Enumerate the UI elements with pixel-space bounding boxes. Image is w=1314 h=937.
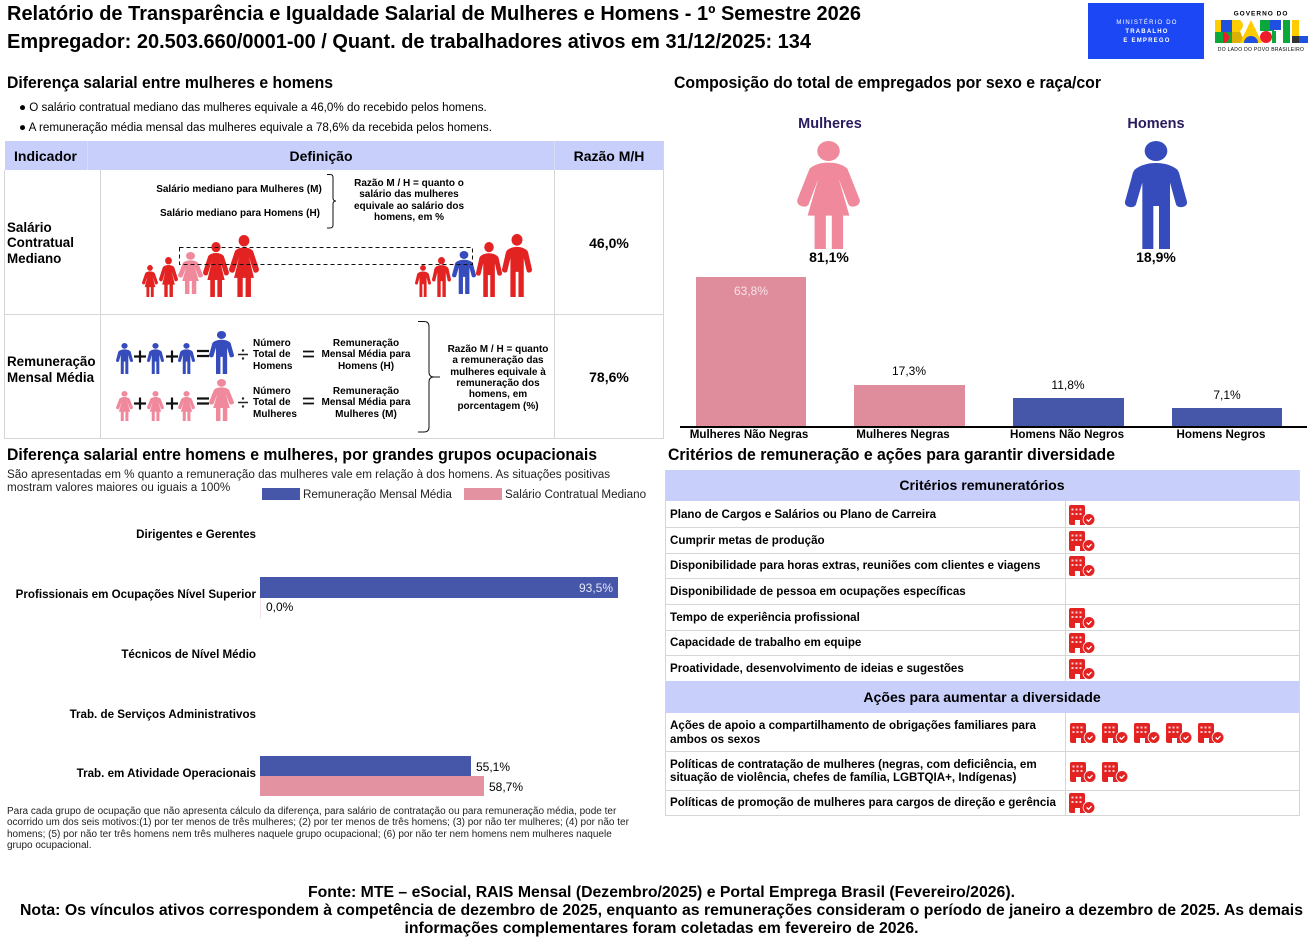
bar chart: occupational groups: Trab. de Serviços Administrativos (70, 708, 256, 721)
criteria rows: Disponibilidade para horas extras, reuniões com clientes e viagens (670, 559, 1040, 572)
formula: men (116, 331, 411, 374)
table header: Indicador (14, 148, 78, 164)
panel: criteria table (666, 470, 1300, 816)
formula: men: Remuneração (333, 338, 399, 349)
bar chart: occupational groups: Dirigentes e Gerentes (136, 528, 256, 541)
action rows: situação de violência, chefes de família, LGBTQIA+, Indígenas) (670, 771, 1016, 784)
row label: Salário Contratual Mediano: Mediano (7, 251, 61, 266)
formula: men: Total de (253, 349, 291, 360)
panel: Homens (1125, 116, 1187, 265)
criteria rows: Tempo de experiência profissional (670, 611, 860, 624)
brace (418, 322, 440, 432)
text block: footnote: Para cada grupo de ocupação que não apresenta cálculo da diferença, para salário de contratação ou para remuneração média, pode ter (7, 806, 617, 817)
logo: Governo do Brasil (1215, 10, 1308, 53)
text: razão remuneração: homens, em (469, 389, 527, 400)
row label: Salário Contratual Mediano: Contratual (7, 235, 74, 250)
action icons (1069, 723, 1224, 814)
criteria rows: Disponibilidade de pessoa em ocupações específicas (670, 585, 966, 598)
bar chart: composition by race: Mulheres Negras (856, 428, 950, 441)
footer: source and note: Fonte: MTE – eSocial, RAIS Mensal (Dezembro/2025) e Portal Emprega Brasil (Fevereiro/2026). (308, 884, 1015, 901)
text block: footnote: grupo ocupacional. (7, 840, 92, 851)
logo: Governo do Brasil: GOVERNO DO (1234, 10, 1288, 18)
bar chart: composition by race: 11,8% (1051, 378, 1085, 392)
section header: ações: Ações para aumentar a diversidade (863, 689, 1101, 705)
icons: women ordered by salary (142, 235, 259, 297)
bar chart: occupational groups: 55,1% (476, 760, 510, 774)
action rows: ambos os sexos (670, 733, 760, 746)
row label: Salário Contratual Mediano (7, 220, 74, 266)
bar chart: composition by race: 7,1% (1213, 388, 1241, 402)
panel: Homens: Homens (1127, 116, 1185, 132)
row label: Remuneração Mensal Média: Remuneração (7, 354, 96, 369)
formula: women: Mulheres (253, 409, 297, 420)
bar chart: occupational groups: 0,0% (266, 600, 294, 614)
criteria icons (1069, 505, 1095, 680)
formula: women: Remuneração (333, 386, 399, 397)
formula: salário mediano: homens, em % (374, 212, 444, 223)
logo: Governo do Brasil: DO LADO DO POVO BRASILEIRO (1218, 47, 1304, 53)
bar chart: composition by race: 17,3% (892, 364, 926, 378)
row label: Remuneração Mensal Média (7, 354, 96, 385)
bar chart: occupational groups: 93,5% (579, 581, 613, 595)
text block: footnote (7, 806, 630, 851)
footer: source and note: informações complementares foram coletadas em fevereiro de 2026. (404, 920, 918, 937)
formula: men: Número (253, 338, 291, 349)
panel: Mulheres (797, 116, 862, 265)
icons: men ordered by salary (415, 234, 532, 297)
legend (262, 488, 646, 501)
row label: Salário Contratual Mediano: Salário (7, 220, 52, 235)
table header (5, 141, 663, 170)
text block: bullets: ● A remuneração média mensal das mulheres equivale a 78,6% da recebida pelos homens. (19, 121, 492, 134)
text block: bullets (19, 101, 492, 134)
logo: Ministério do Trabalho e Emprego: E EMPREGO (1123, 38, 1171, 44)
panel: Homens: 18,9% (1136, 249, 1176, 265)
formula: women (116, 379, 411, 421)
heading: diferença salarial: Diferença salarial entre mulheres e homens (7, 74, 333, 92)
bar chart: occupational groups: Profissionais em Ocupações Nível Superior (16, 588, 256, 601)
bar chart: composition by race: 63,8% (734, 284, 768, 298)
panel: indicator table (4, 141, 664, 438)
value: 78,6%: 78,6% (589, 369, 629, 385)
formula: women: Mensal Média para (322, 397, 411, 408)
text: razão remuneração: remuneração dos (456, 378, 540, 389)
formula: women: Número (253, 386, 291, 397)
logo: Ministério do Trabalho e Emprego: TRABALHO (1125, 29, 1169, 35)
section header: critérios remuneratórios: Critérios remuneratórios (899, 477, 1065, 493)
heading: critérios: Critérios de remuneração e ações para garantir diversidade (668, 446, 1115, 464)
action rows: Ações de apoio a compartilhamento de obrigações familiares para (670, 719, 1037, 732)
text block: bullets: ● O salário contratual mediano das mulheres equivale a 46,0% do recebido pelos homens. (19, 101, 487, 114)
bar chart: composition by race: Mulheres Não Negras (690, 428, 808, 441)
formula: women: Mulheres (M) (335, 409, 397, 420)
text: razão remuneração: porcentagem (%) (457, 401, 539, 412)
text block: chart description (7, 468, 610, 494)
table header: Razão M/H (574, 148, 644, 164)
panel: Mulheres: 81,1% (809, 249, 849, 265)
footer: source and note: Nota: Os vínculos ativos correspondem à competência de dezembro de 2025, enquanto as remunerações consideram o período de janeiro a dezembro de 2025. As demais (20, 902, 1303, 919)
formula: salário mediano: Salário mediano para Homens (H) (160, 208, 320, 219)
criteria rows: Plano de Cargos e Salários ou Plano de Carreira (670, 508, 937, 521)
logo: Ministério do Trabalho e Emprego: MINISTÉRIO DO (1116, 19, 1178, 26)
heading: grupos ocupacionais: Diferença salarial entre homens e mulheres, por grandes grupos ocupacionais (7, 446, 597, 464)
title (7, 3, 861, 53)
title: Relatório de Transparência e Igualdade Salarial de Mulheres e Homens - 1º Semestre 2026 (7, 3, 861, 25)
bar chart: occupational groups: Técnicos de Nível Médio (121, 648, 256, 661)
value: 46,0%: 46,0% (589, 235, 629, 251)
formula: men: Homens (253, 361, 293, 372)
text block: chart description: São apresentadas em % quanto a remuneração das mulheres vale em relação à dos homens. As situações positivas (7, 468, 610, 481)
legend: Salário Contratual Mediano (505, 488, 646, 501)
text: razão remuneração (448, 344, 548, 412)
bar chart: composition by race (680, 277, 1307, 441)
bar chart: occupational groups: 58,7% (489, 780, 523, 794)
title: Empregador: 20.503.660/0001-00 / Quant. de trabalhadores ativos em 31/12/2025: 134 (7, 31, 812, 53)
footer: source and note (20, 884, 1303, 937)
criteria rows: Cumprir metas de produção (670, 534, 825, 547)
formula: women: Total de (253, 397, 291, 408)
formula: salário mediano: salário das mulheres (359, 189, 459, 200)
bar chart: occupational groups: Trab. em Atividade Operacionais (77, 767, 256, 780)
panel: Mulheres: Mulheres (798, 116, 862, 132)
bar chart: composition by race: Homens Não Negros (1010, 428, 1124, 441)
formula: men: Homens (H) (338, 361, 394, 372)
legend: Remuneração Mensal Média (303, 488, 452, 501)
bar chart: composition by race: Homens Negros (1177, 428, 1265, 441)
table header: Definição (289, 148, 353, 164)
row label: Remuneração Mensal Média: Mensal Média (7, 370, 95, 385)
text: razão remuneração: mulheres equivale à (450, 367, 546, 378)
formula: salário mediano: equivale ao salário dos (354, 201, 464, 212)
action rows: Políticas de contratação de mulheres (negras, com deficiência, em (670, 758, 1037, 771)
formula: salário mediano (156, 174, 464, 228)
action rows (670, 719, 1057, 809)
criteria rows (670, 508, 1040, 675)
text: razão remuneração: a remuneração das (452, 355, 544, 366)
logo: Ministério do Trabalho e Emprego (1088, 3, 1204, 59)
heading: composição: Composição do total de empregados por sexo e raça/cor (674, 74, 1102, 92)
action rows: Políticas de promoção de mulheres para cargos de direção e gerência (670, 796, 1057, 809)
text block: footnote: ocorrido um dos seis motivos:(1) por ter menos de três mulheres; (2) por ter menos de três homens; (3) por não ter mulheres; (4) por não ter (7, 817, 630, 828)
text block: footnote: homens; (5) por não ter três homens nem três mulheres naquele grupo ocupacional; (6) por não ter nem homens nem mulheres naquele (7, 829, 612, 840)
bar chart: occupational groups (16, 528, 618, 796)
criteria rows: Proatividade, desenvolvimento de ideias e sugestões (670, 662, 964, 675)
text: razão remuneração: Razão M / H = quanto (448, 344, 548, 355)
formula: salário mediano: Salário mediano para Mulheres (M) (156, 184, 322, 195)
formula: men: Mensal Média para (322, 349, 411, 360)
criteria rows: Capacidade de trabalho em equipe (670, 636, 862, 649)
formula: salário mediano: Razão M / H = quanto o (354, 178, 464, 189)
text block: chart description: mostram valores maiores ou iguais a 100% (7, 481, 230, 494)
